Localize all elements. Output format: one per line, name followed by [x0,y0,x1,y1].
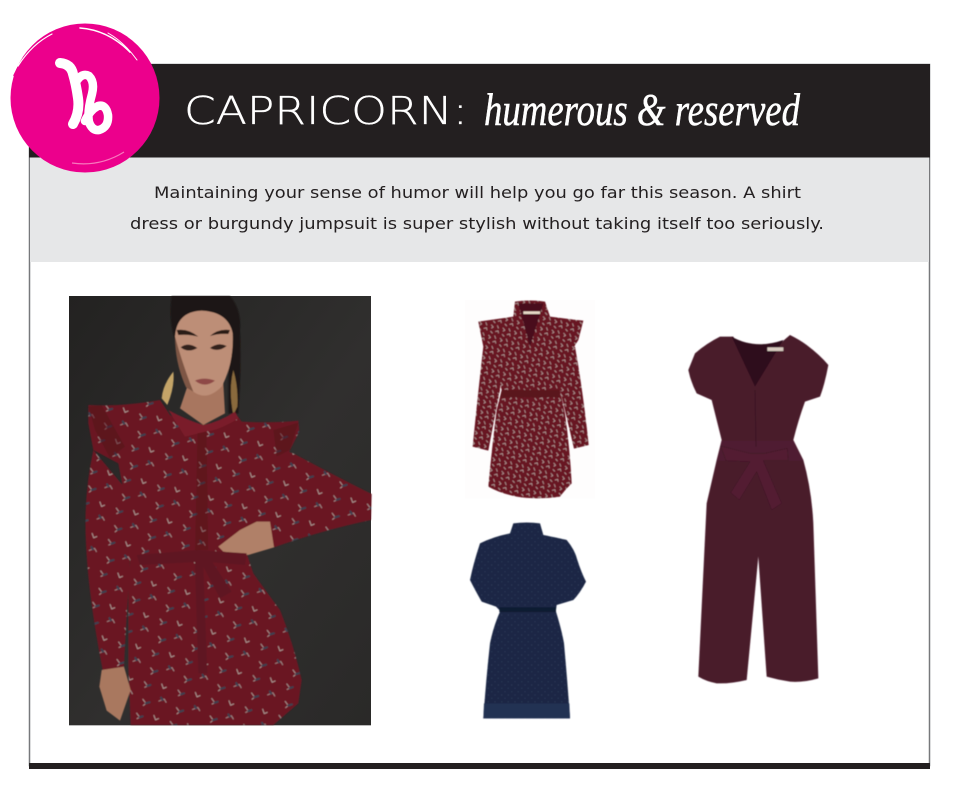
facial features [181,345,197,351]
hair [171,296,241,413]
neckline [518,303,543,347]
product: burgundy jumpsuit [688,335,828,683]
left hand [99,667,131,721]
centre seam [755,390,756,447]
header bar [29,64,930,158]
text block: intro copy: Maintaining your sense of humor will help you go far this season. A shirt [154,183,801,202]
placket [195,432,208,550]
label [767,347,783,351]
waistband [717,441,803,461]
bow and tie [721,446,788,510]
photo: model in burgundy shirt dress [69,296,372,725]
waist seam [499,607,556,612]
dress body [88,400,302,725]
right arm [267,447,372,547]
hem shade [483,703,570,718]
label [523,311,540,314]
face [175,311,233,396]
ruffles [88,405,125,458]
body [478,300,583,498]
collar [168,410,238,437]
skirt [483,612,570,718]
sleeves and bodice [470,522,586,610]
bottom bar [29,763,930,769]
heading: script tagline: humerous & reserved [484,84,801,135]
neck [180,383,225,425]
panel: intro band [30,157,929,262]
product: navy dotted dress [470,522,586,718]
hand on waist [218,522,274,555]
left sleeve [85,450,130,670]
icon: pink brush circle with Capricorn glyph [10,24,160,172]
product: burgundy floral dress [465,300,595,498]
belt and tie [137,550,247,673]
heading: sign name: CAPRICORN: [184,89,468,133]
neckline [732,337,783,387]
sleeves [473,347,503,451]
text block: intro copy: dress or burgundy jumpsuit is super stylish without taking itself too seriously. [130,214,824,233]
belt [501,390,560,397]
text block: intro copy [130,183,824,233]
earrings [162,372,174,405]
